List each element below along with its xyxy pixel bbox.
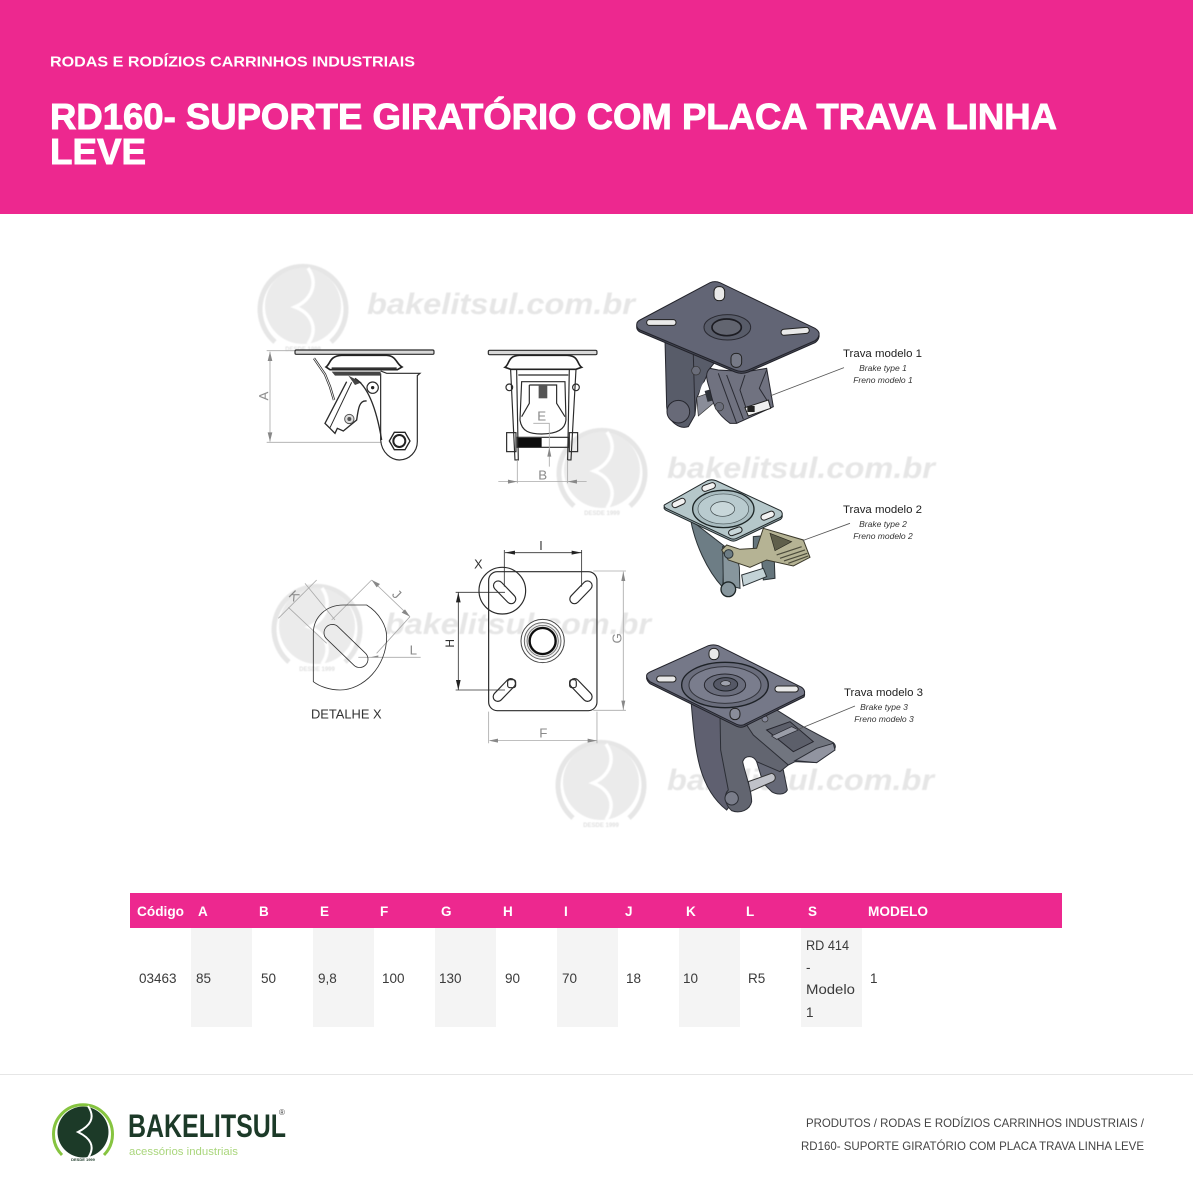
- table header: Código: [137, 904, 184, 919]
- technical drawing: detail X: K: [286, 587, 303, 604]
- table row: -: [806, 960, 810, 975]
- technical drawing: side view with dimension A: [256, 350, 434, 460]
- label: brake model 1: [843, 348, 922, 385]
- footer breadcrumb: PRODUTOS / RODAS E RODÍZIOS CARRINHOS INDUSTRIAIS /: [806, 1115, 1145, 1130]
- table row: 1: [806, 1005, 814, 1020]
- label: brake model 3: Trava modelo 3: [844, 687, 923, 699]
- table header: E: [320, 904, 329, 919]
- footer logo: DESDE 1999: [71, 1157, 96, 1162]
- watermarks: bakelitsul.com.br: [367, 288, 638, 321]
- technical drawing: top view with dimensions I H G F: X: [474, 558, 483, 572]
- table row: 70: [562, 971, 577, 986]
- table row: 9,8: [318, 971, 337, 986]
- label: DETALHE X: DETALHE X: [311, 707, 382, 721]
- footer logo: ®: [279, 1108, 285, 1117]
- technical drawing: top view with dimensions I H G F: H: [443, 639, 457, 648]
- label: brake model 2: Freno modelo 2: [853, 531, 913, 541]
- table header: MODELO: [868, 904, 928, 919]
- title: LEVE: [50, 131, 146, 172]
- header banner: [0, 0, 1193, 214]
- technical drawing: top view with dimensions I H G F: G: [609, 633, 624, 644]
- table header: A: [198, 904, 208, 919]
- watermarks: [260, 266, 938, 829]
- technical drawing: top view with dimensions I H G F: I: [539, 538, 543, 553]
- table row: 1: [870, 971, 878, 986]
- footer breadcrumb: RD160- SUPORTE GIRATÓRIO COM PLACA TRAVA LINHA LEVE: [801, 1138, 1144, 1153]
- technical drawing: front view with dimensions E and B: E: [537, 409, 546, 424]
- table header: K: [686, 904, 696, 919]
- table row: R5: [748, 971, 765, 986]
- label: brake model 2: [843, 504, 922, 541]
- technical drawing: top view with dimensions I H G F: [443, 538, 626, 743]
- watermarks: bakelitsul.com.br: [385, 608, 653, 641]
- table header: B: [259, 904, 269, 919]
- table header: F: [380, 904, 388, 919]
- watermarks: DESDE 1999: [583, 823, 620, 829]
- table row: 130: [439, 971, 462, 986]
- footer logo: acessórios industriais: [129, 1146, 239, 1158]
- label: brake model 3: Freno modelo 3: [854, 714, 914, 724]
- footer breadcrumb: [801, 1115, 1145, 1153]
- table header: S: [808, 904, 817, 919]
- table row: [139, 928, 878, 1027]
- 3D view: brake model 3: [647, 645, 855, 812]
- label: brake model 1: Freno modelo 1: [853, 375, 913, 385]
- label: brake model 2: Trava modelo 2: [843, 504, 922, 516]
- technical drawing: side view with dimension A: A: [256, 391, 271, 400]
- table header: I: [564, 904, 568, 919]
- title: RD160- SUPORTE GIRATÓRIO COM PLACA TRAVA LINHA: [50, 95, 1057, 137]
- table row: RD 414: [806, 938, 849, 953]
- table header: L: [746, 904, 754, 919]
- table row: 100: [382, 971, 405, 986]
- technical drawing: detail X: [278, 580, 421, 721]
- technical drawing: top view with dimensions I H G F: F: [539, 725, 547, 740]
- label: brake model 2: Brake type 2: [859, 519, 907, 529]
- footer logo: BAKELITSUL: [128, 1108, 286, 1144]
- label: brake model 3: Brake type 3: [860, 702, 908, 712]
- table header: H: [503, 904, 513, 919]
- table row: 10: [683, 971, 698, 986]
- footer divider: [0, 1074, 1193, 1075]
- table header: J: [625, 904, 633, 919]
- 3D view: brake model 1: [637, 282, 844, 427]
- table header: G: [441, 904, 452, 919]
- technical drawing: detail X: J: [389, 587, 404, 602]
- table row: 18: [626, 971, 641, 986]
- title: [50, 95, 1057, 172]
- table header: [130, 893, 1062, 928]
- footer logo: [54, 1105, 286, 1162]
- watermarks: DESDE 1999: [285, 347, 322, 353]
- label: brake model 3: [844, 687, 923, 724]
- table row: 03463: [139, 971, 177, 986]
- table row: 85: [196, 971, 211, 986]
- watermarks: bakelitsul.com.br: [667, 452, 938, 485]
- watermarks: bakelitsul.com.br: [667, 764, 937, 797]
- breadcrumb category: RODAS E RODÍZIOS CARRINHOS INDUSTRIAIS: [50, 54, 415, 70]
- specifications table: [130, 893, 1062, 1027]
- technical drawing: front view with dimensions E and B: [488, 350, 597, 484]
- watermarks: DESDE 1999: [584, 511, 621, 517]
- table row: 90: [505, 971, 520, 986]
- table row: 50: [261, 971, 276, 986]
- table row: Modelo: [806, 982, 855, 997]
- label: brake model 1: Trava modelo 1: [843, 348, 922, 360]
- label: brake model 1: Brake type 1: [859, 363, 907, 373]
- 3D view: brake model 2: [664, 480, 850, 597]
- technical drawing: detail X: L: [410, 643, 417, 658]
- technical drawing: front view with dimensions E and B: B: [538, 467, 547, 482]
- watermarks: DESDE 1999: [299, 667, 336, 673]
